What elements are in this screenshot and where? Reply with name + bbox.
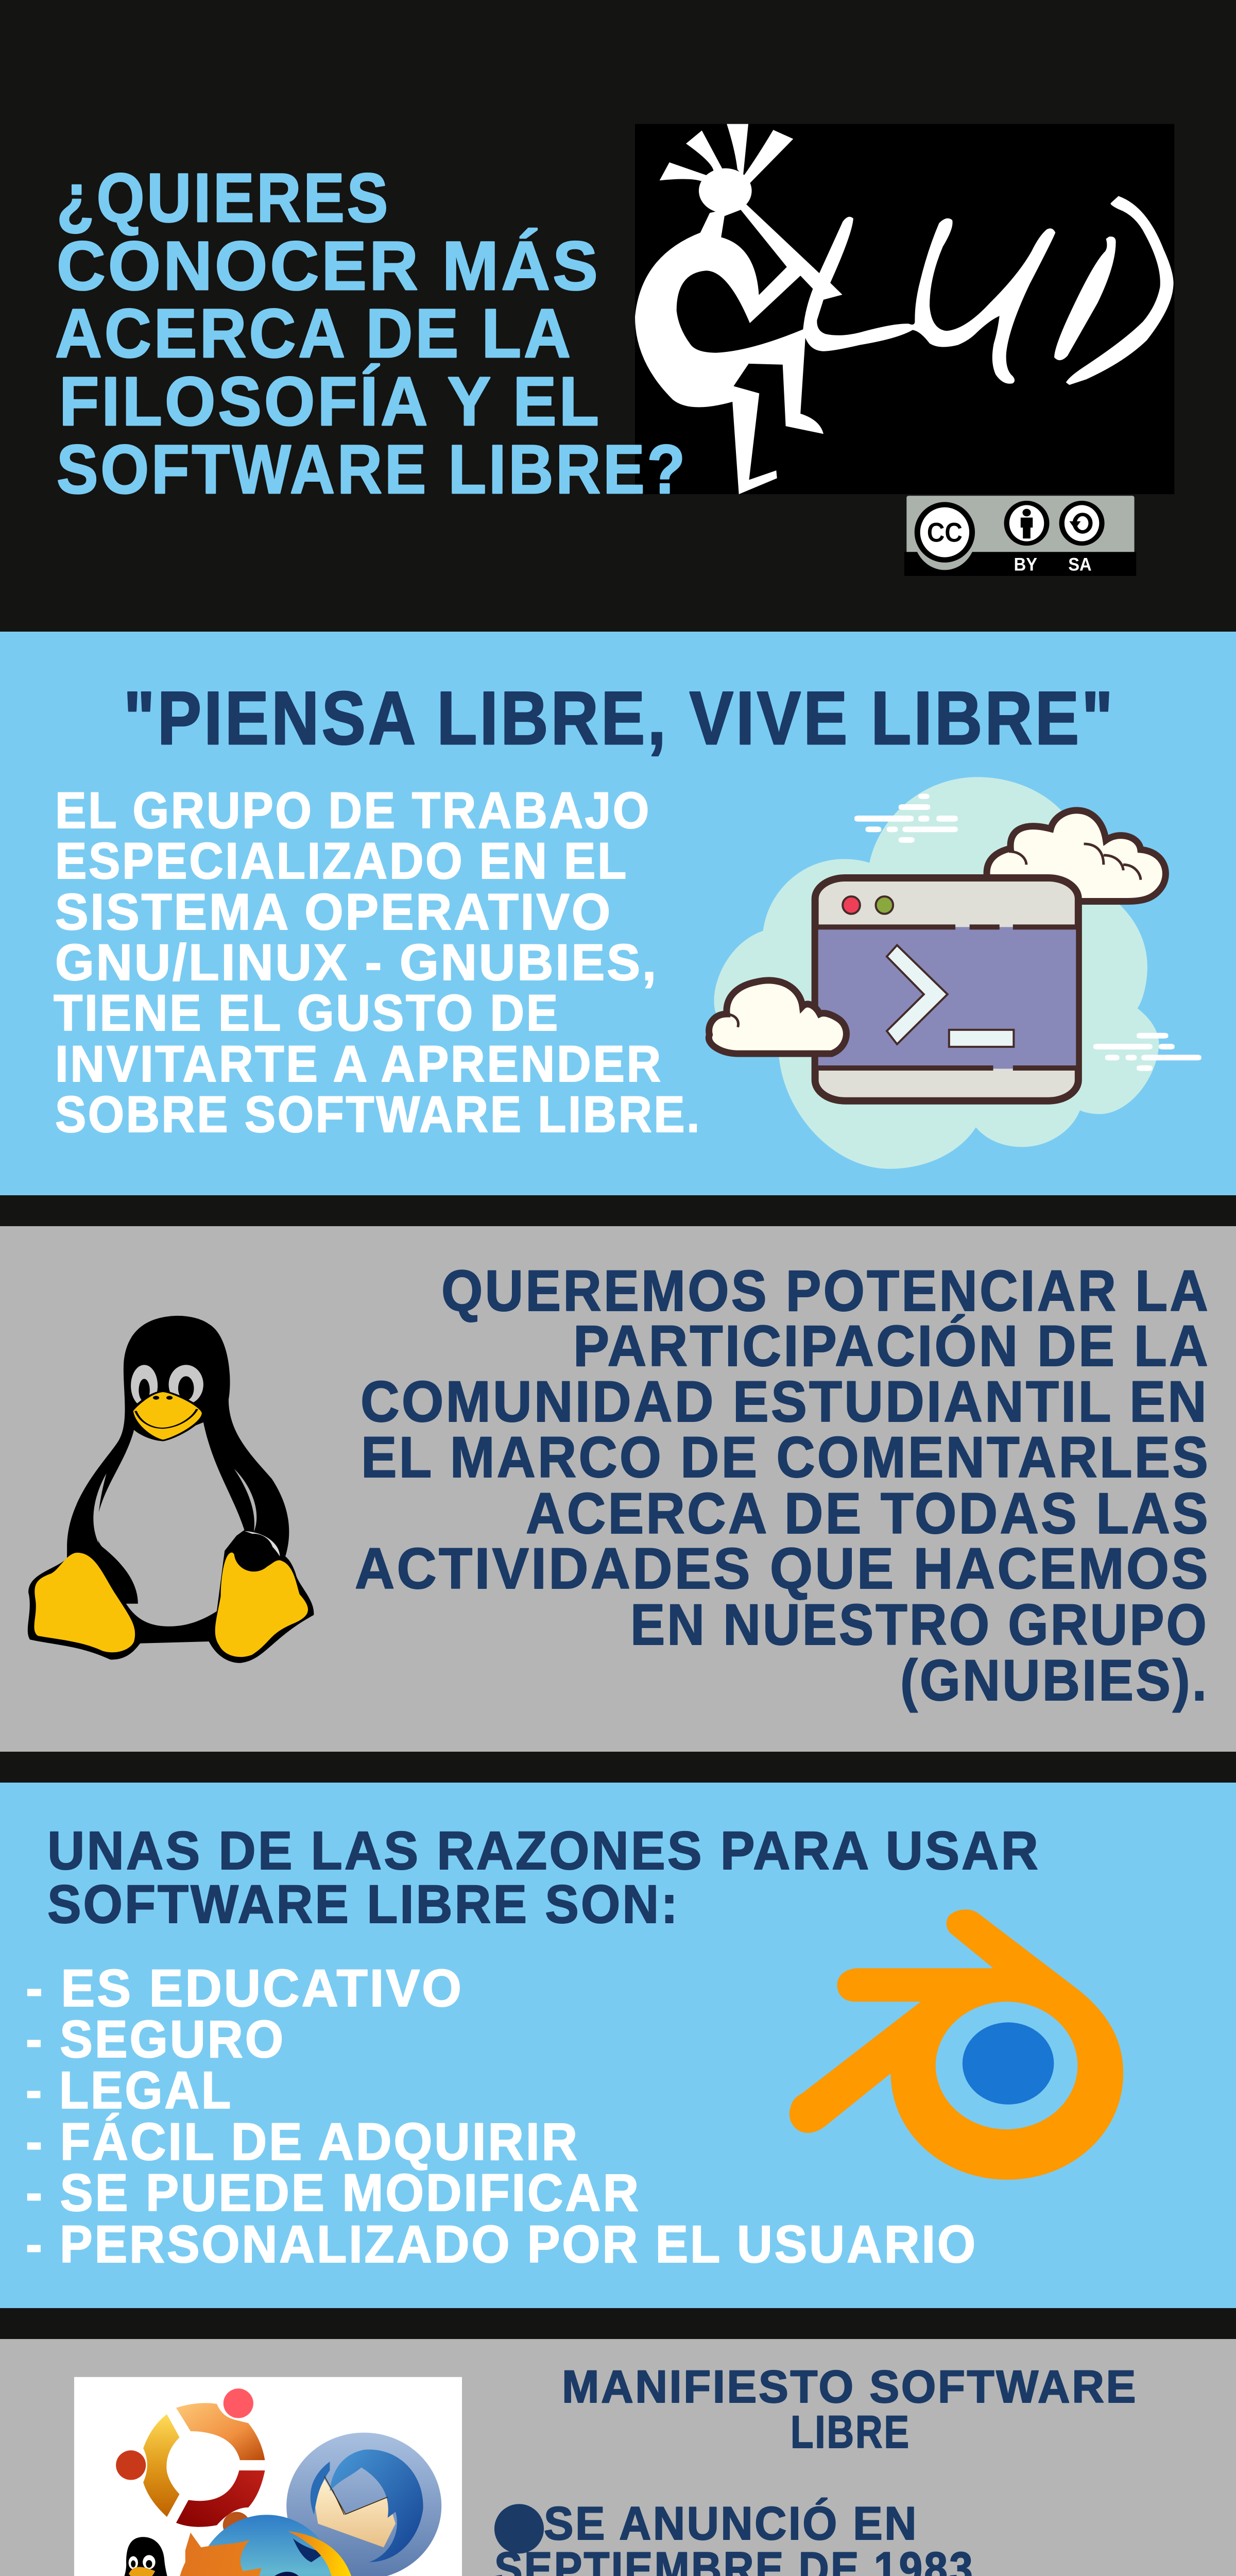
list: manifesto points xyxy=(491,2485,1196,2576)
icon collage: free software logos xyxy=(74,2377,462,2576)
icon: tux penguin xyxy=(28,1316,314,1663)
icon: ubuntu xyxy=(116,2388,265,2538)
title: SOFTWARE LIBRE? xyxy=(57,431,688,508)
text block: invitation: SISTEMA OPERATIVO xyxy=(55,883,612,940)
heading xyxy=(47,1821,1040,1935)
heading: MANIFIESTO SOFTWARE xyxy=(562,2361,1138,2412)
panel: manifiesto xyxy=(0,2339,1236,2576)
heading: LIBRE xyxy=(791,2406,911,2458)
title xyxy=(55,160,688,508)
text block: invitation xyxy=(54,782,701,1143)
badge: creative commons BY-SA: SA xyxy=(1068,555,1092,575)
text block: mission: ACTIVIDADES QUE HACEMOS xyxy=(355,1536,1210,1601)
icon: firefox xyxy=(177,2515,354,2576)
badge: creative commons BY-SA: BY xyxy=(1014,555,1037,575)
badge: creative commons BY-SA: CC xyxy=(927,517,963,548)
icon: thunderbird xyxy=(286,2433,441,2576)
panel: queremos potenciar xyxy=(0,1226,1236,1752)
text block: mission: (GNUBIES). xyxy=(900,1648,1209,1713)
logo: kokopelli CLUD xyxy=(635,124,1174,494)
text block: mission: PARTICIPACIÓN DE LA xyxy=(573,1314,1210,1378)
icon: terminal window with clouds xyxy=(709,777,1201,1169)
heading: SOFTWARE LIBRE SON: xyxy=(47,1874,680,1935)
text block: invitation: ESPECIALIZADO EN EL xyxy=(55,832,628,889)
title: ACERCA DE LA xyxy=(55,295,573,372)
badge: creative commons BY-SA xyxy=(904,496,1136,576)
text block: invitation: SOBRE SOFTWARE LIBRE. xyxy=(55,1086,701,1143)
title: CONOCER MÁS xyxy=(57,228,600,304)
title: FILOSOFÍA Y EL xyxy=(59,363,602,440)
panel: header xyxy=(55,124,1174,576)
heading xyxy=(562,2361,1138,2458)
icon: tux small xyxy=(90,2537,191,2576)
heading: UNAS DE LAS RAZONES PARA USAR xyxy=(47,1821,1040,1881)
text block: invitation: EL GRUPO DE TRABAJO xyxy=(55,782,651,839)
list: reasons: - SE PUEDE MODIFICAR xyxy=(26,2163,641,2222)
icon: blender logo xyxy=(789,1909,1123,2180)
list: reasons: - PERSONALIZADO POR EL USUARIO xyxy=(26,2215,977,2274)
list: reasons: - ES EDUCATIVO xyxy=(26,1959,464,2018)
text block: invitation: GNU/LINUX - GNUBIES, xyxy=(55,934,658,991)
list: manifesto points: ● xyxy=(491,2485,547,2561)
list: reasons: - FÁCIL DE ADQUIRIR xyxy=(26,2112,579,2171)
text block: invitation: INVITARTE A APRENDER xyxy=(55,1035,663,1092)
list: reasons xyxy=(26,1959,977,2274)
text block: mission xyxy=(355,1259,1210,1713)
panel: razones xyxy=(0,1783,1236,2308)
list: manifesto points: SE ANUNCIÓ EN xyxy=(544,2498,918,2550)
heading: "PIENSA LIBRE, VIVE LIBRE" xyxy=(124,676,1115,760)
list: reasons: - SEGURO xyxy=(26,2010,285,2069)
text block: invitation: TIENE EL GUSTO DE xyxy=(54,984,560,1041)
title: ¿QUIERES xyxy=(57,160,390,236)
list: reasons: - LEGAL xyxy=(26,2061,233,2120)
panel: piensa libre xyxy=(0,632,1236,1195)
